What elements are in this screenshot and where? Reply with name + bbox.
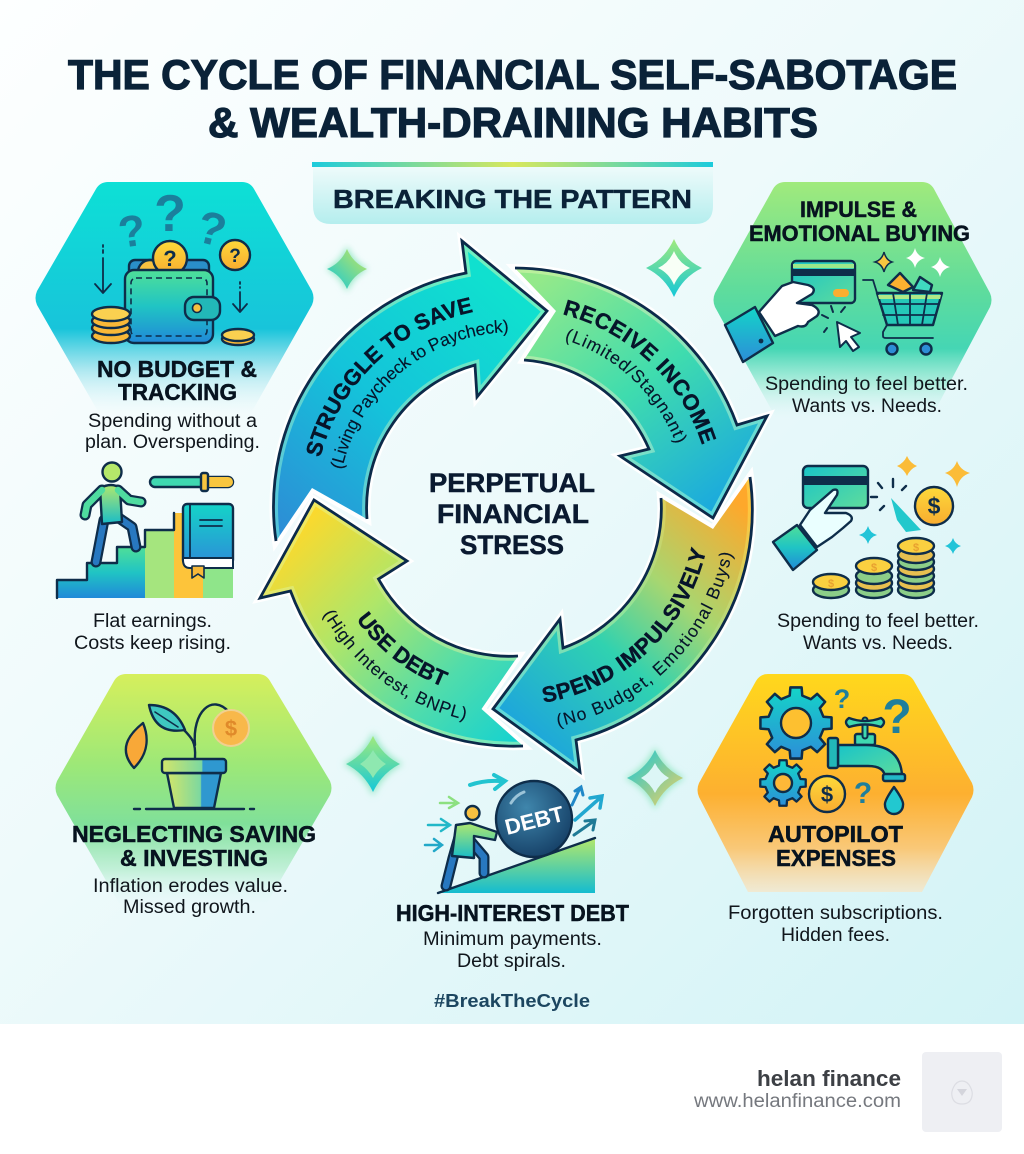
icon: wallet with question marks: ? — [115, 206, 149, 258]
icon: sparkle top right — [646, 239, 702, 297]
icon: gears, faucet and question marks: ? — [834, 684, 850, 714]
text: no budget description: Spending without a — [88, 411, 257, 432]
arrow: use debt — [252, 494, 532, 750]
sublabel: living paycheck to paycheck: (Living Paycheck to Paycheck) — [330, 320, 508, 468]
text: stagnant income description — [74, 611, 231, 654]
title: THE CYCLE OF FINANCIAL SELF-SABOTAGE — [68, 51, 957, 98]
icon: card, hand and shopping cart — [725, 248, 950, 362]
footer brand text: www.helanfinance.com — [693, 1091, 901, 1112]
text: debt description — [423, 929, 602, 972]
sublabel: limited stagnant: (Limited/Stagnant) — [566, 329, 687, 443]
icon: hand tapping card with coin stacks: $ — [913, 542, 919, 554]
footer brand text — [693, 1066, 901, 1112]
heading: no budget — [97, 356, 257, 405]
arrow: struggle to save — [270, 232, 551, 552]
heading: neglecting saving: NEGLECTING SAVING — [72, 821, 316, 847]
panel: autopilot expenses — [698, 674, 974, 946]
icon: hand tapping card with coin stacks: $ — [828, 578, 834, 590]
icon: hand tapping card with coin stacks: $ — [871, 562, 877, 574]
icon: wallet with question marks: ? — [163, 246, 177, 271]
icon: gears, faucet and question marks: $ — [821, 782, 833, 807]
text: autopilot description — [728, 903, 943, 946]
heading: impulse: EMOTIONAL BUYING — [749, 221, 970, 246]
center text: perpetual financial stress — [429, 468, 595, 560]
sublabel: no budget, emotional buys: (No Budget, Emotional Buys) — [558, 552, 735, 730]
icon: wallet with question marks: ? — [229, 246, 241, 267]
heading: autopilot — [768, 821, 903, 871]
heading: neglecting saving: & INVESTING — [120, 845, 268, 871]
title — [68, 51, 957, 146]
text: neglecting description: Inflation erodes value. — [93, 876, 288, 897]
panel: high-interest debt — [396, 775, 629, 972]
panel: stagnant income — [57, 462, 233, 654]
text: no budget description: plan. Overspending. — [85, 432, 260, 453]
text: autopilot description: Forgotten subscriptions. — [728, 903, 943, 924]
icon: wallet with question marks — [92, 185, 254, 345]
footer — [0, 1024, 1024, 1154]
icon: person climbing stairs with book — [57, 462, 233, 598]
heading: autopilot: AUTOPILOT — [768, 821, 903, 847]
title: & WEALTH-DRAINING HABITS — [208, 99, 818, 146]
icon: sparkle bottom right — [625, 747, 685, 809]
footer logo — [922, 1052, 1002, 1132]
sublabel: high interest, bnpl: (High Interest, BNPL) — [322, 610, 466, 722]
icon: sparkle top left — [326, 246, 368, 292]
panel: neglecting saving and investing — [56, 674, 332, 918]
text: debt description: Debt spirals. — [457, 951, 566, 972]
heading: impulse: IMPULSE & — [800, 197, 917, 222]
icon: wallet with question marks: ? — [154, 185, 186, 243]
text: stagnant income description: Flat earnings. — [93, 611, 212, 632]
text: autopilot description: Hidden fees. — [781, 925, 890, 946]
label: receive income: RECEIVE INCOME — [563, 300, 716, 444]
icon: gears, faucet and question marks: ? — [882, 691, 912, 744]
text: stagnant income description: Costs keep rising. — [74, 633, 231, 654]
label: spend impulsively: SPEND IMPULSIVELY — [542, 546, 705, 702]
text: neglecting description: Missed growth. — [123, 897, 256, 918]
label: struggle to save: STRUGGLE TO SAVE — [306, 297, 473, 456]
center text: perpetual financial stress: STRESS — [460, 530, 564, 560]
text: spending description: Wants vs. Needs. — [803, 633, 953, 654]
icon: gears, faucet and question marks — [760, 684, 912, 814]
label: use debt: USE DEBT — [358, 611, 449, 686]
banner: breaking the pattern — [312, 162, 713, 224]
arrow: spend impulsively — [488, 467, 756, 780]
arrow: receive income — [506, 264, 775, 522]
panel: no budget and tracking — [36, 182, 314, 453]
banner: breaking the pattern: BREAKING THE PATTERN — [333, 184, 692, 214]
icon: gears, faucet and question marks: ? — [854, 777, 872, 810]
hashtag: #BreakTheCycle — [434, 991, 590, 1011]
text: no budget description — [85, 411, 260, 453]
icon: hand tapping card with coin stacks — [773, 456, 970, 598]
icon: person pushing debt boulder uphill — [425, 775, 602, 893]
text: impulse description: Spending to feel better. — [765, 374, 968, 395]
center text: perpetual financial stress: FINANCIAL — [437, 499, 589, 529]
heading: impulse — [749, 197, 970, 246]
heading: autopilot: EXPENSES — [776, 845, 896, 871]
text: impulse description — [765, 374, 968, 417]
icon: sparkle bottom left — [343, 732, 403, 796]
text: impulse description: Wants vs. Needs. — [792, 396, 942, 417]
text: debt description: Minimum payments. — [423, 929, 602, 950]
icon: potted plant with coin: $ — [225, 716, 237, 741]
text: neglecting description — [93, 876, 288, 918]
icon: person pushing debt boulder uphill: DEBT — [502, 801, 567, 840]
panel: impulse and emotional buying — [714, 182, 992, 420]
heading: high-interest debt: HIGH-INTEREST DEBT — [396, 900, 629, 926]
heading: no budget: NO BUDGET & — [97, 356, 257, 382]
heading: no budget: TRACKING — [118, 379, 237, 405]
icon: hand tapping card with coin stacks: $ — [928, 493, 941, 519]
text: spending description: Spending to feel better. — [777, 611, 979, 632]
panel: spending illustration with coins — [773, 456, 979, 654]
text: spending description — [777, 611, 979, 654]
footer brand text: helan finance — [757, 1066, 901, 1091]
heading: neglecting saving — [72, 821, 316, 871]
center text: perpetual financial stress: PERPETUAL — [429, 468, 595, 498]
icon: wallet with question marks: ? — [192, 200, 232, 257]
icon: potted plant with coin — [126, 704, 254, 809]
